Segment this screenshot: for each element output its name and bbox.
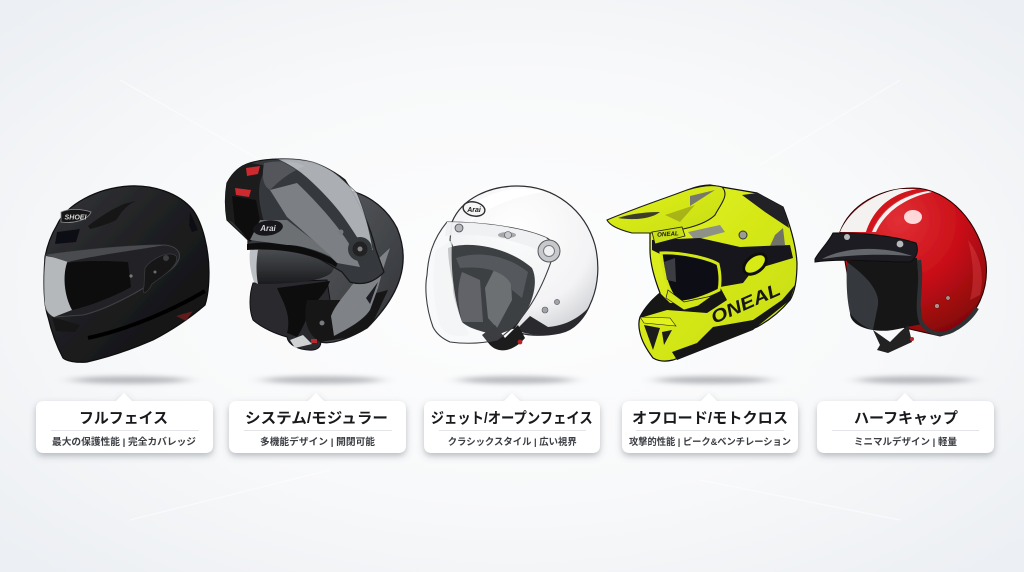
side pod (143, 254, 177, 293)
description: ミニマルデザイン | 軽量 (854, 436, 957, 448)
helmet: full face: SHOEI (64, 214, 88, 222)
highlight (904, 210, 922, 224)
gray stripes (688, 225, 725, 240)
logo (252, 218, 284, 238)
peak (607, 186, 725, 233)
logo (462, 200, 486, 218)
strap (873, 325, 912, 353)
rear shell (300, 190, 403, 343)
heading: システム/モジュラー (245, 410, 388, 427)
strap (482, 325, 525, 350)
inner dark (232, 196, 262, 242)
rim (247, 243, 338, 267)
lower right guard (305, 290, 388, 342)
helmet: motocross (607, 185, 797, 361)
brand tag (652, 227, 685, 244)
card (622, 393, 798, 453)
sun visor (250, 249, 337, 284)
opening (65, 261, 131, 310)
trim (919, 260, 977, 334)
heading: ハーフキャップ (854, 410, 958, 427)
visor (44, 245, 179, 317)
description: クラシックスタイル | 広い視界 (448, 436, 577, 448)
heading: オフロード/モトクロス (632, 410, 788, 427)
O logo (740, 250, 770, 278)
description: 最大の保護性能 | 完全カバレッジ (52, 436, 196, 448)
top vent (88, 201, 136, 229)
card (424, 393, 600, 453)
goggles (661, 253, 720, 302)
red reflectors (246, 166, 260, 176)
card (817, 393, 994, 453)
top panel (263, 161, 305, 190)
silver wedge (331, 248, 390, 336)
chin padding (250, 280, 330, 350)
shell (450, 186, 598, 335)
description: 攻撃的性能 | ピーク&ベンチレーション (629, 436, 791, 448)
label: motocross (622, 393, 798, 453)
interior (847, 258, 922, 331)
label: full face (36, 393, 213, 453)
shell (840, 188, 986, 336)
black band (652, 238, 793, 287)
inner black (277, 281, 330, 337)
helmet: jet (426, 186, 598, 350)
card (229, 393, 406, 453)
label: modular (229, 393, 406, 453)
helmet: modular (226, 159, 403, 350)
heading: ジェット/オープンフェイス (431, 410, 593, 427)
helmet: modular: Arai (259, 224, 277, 233)
lower black strip (672, 285, 795, 360)
clear shield (277, 159, 373, 253)
strap (290, 335, 312, 348)
snap (538, 240, 560, 262)
helmet: jet: Arai (466, 207, 482, 214)
label: half cap (817, 393, 994, 453)
mouth black (640, 287, 727, 318)
helmet: motocross: ONEAL (657, 230, 679, 239)
rivets (542, 307, 548, 313)
interior (448, 245, 535, 335)
logo badge (61, 209, 91, 223)
description: 多機能デザイン | 開閉可能 (260, 436, 375, 448)
heading: フルフェイス (79, 410, 168, 427)
chin vents (644, 325, 660, 350)
rivets (935, 304, 939, 308)
clear visor (426, 222, 555, 343)
dark top panel (742, 193, 789, 228)
pivot (348, 237, 372, 261)
helmet: full face (44, 186, 209, 362)
lower trim (88, 291, 205, 338)
flip-up front (226, 159, 384, 284)
silver band (270, 183, 360, 267)
label: jet (424, 393, 600, 453)
peak (815, 233, 917, 262)
helmet: half cap (815, 188, 986, 353)
ground shadows (72, 376, 972, 384)
outer dark (226, 163, 268, 234)
card (36, 393, 213, 453)
grey under logo (250, 220, 333, 258)
trim (516, 306, 590, 335)
base shell (639, 185, 797, 361)
brand wordmark: ONEAL (708, 279, 783, 328)
stripes (840, 189, 917, 232)
clear visor (44, 255, 72, 317)
